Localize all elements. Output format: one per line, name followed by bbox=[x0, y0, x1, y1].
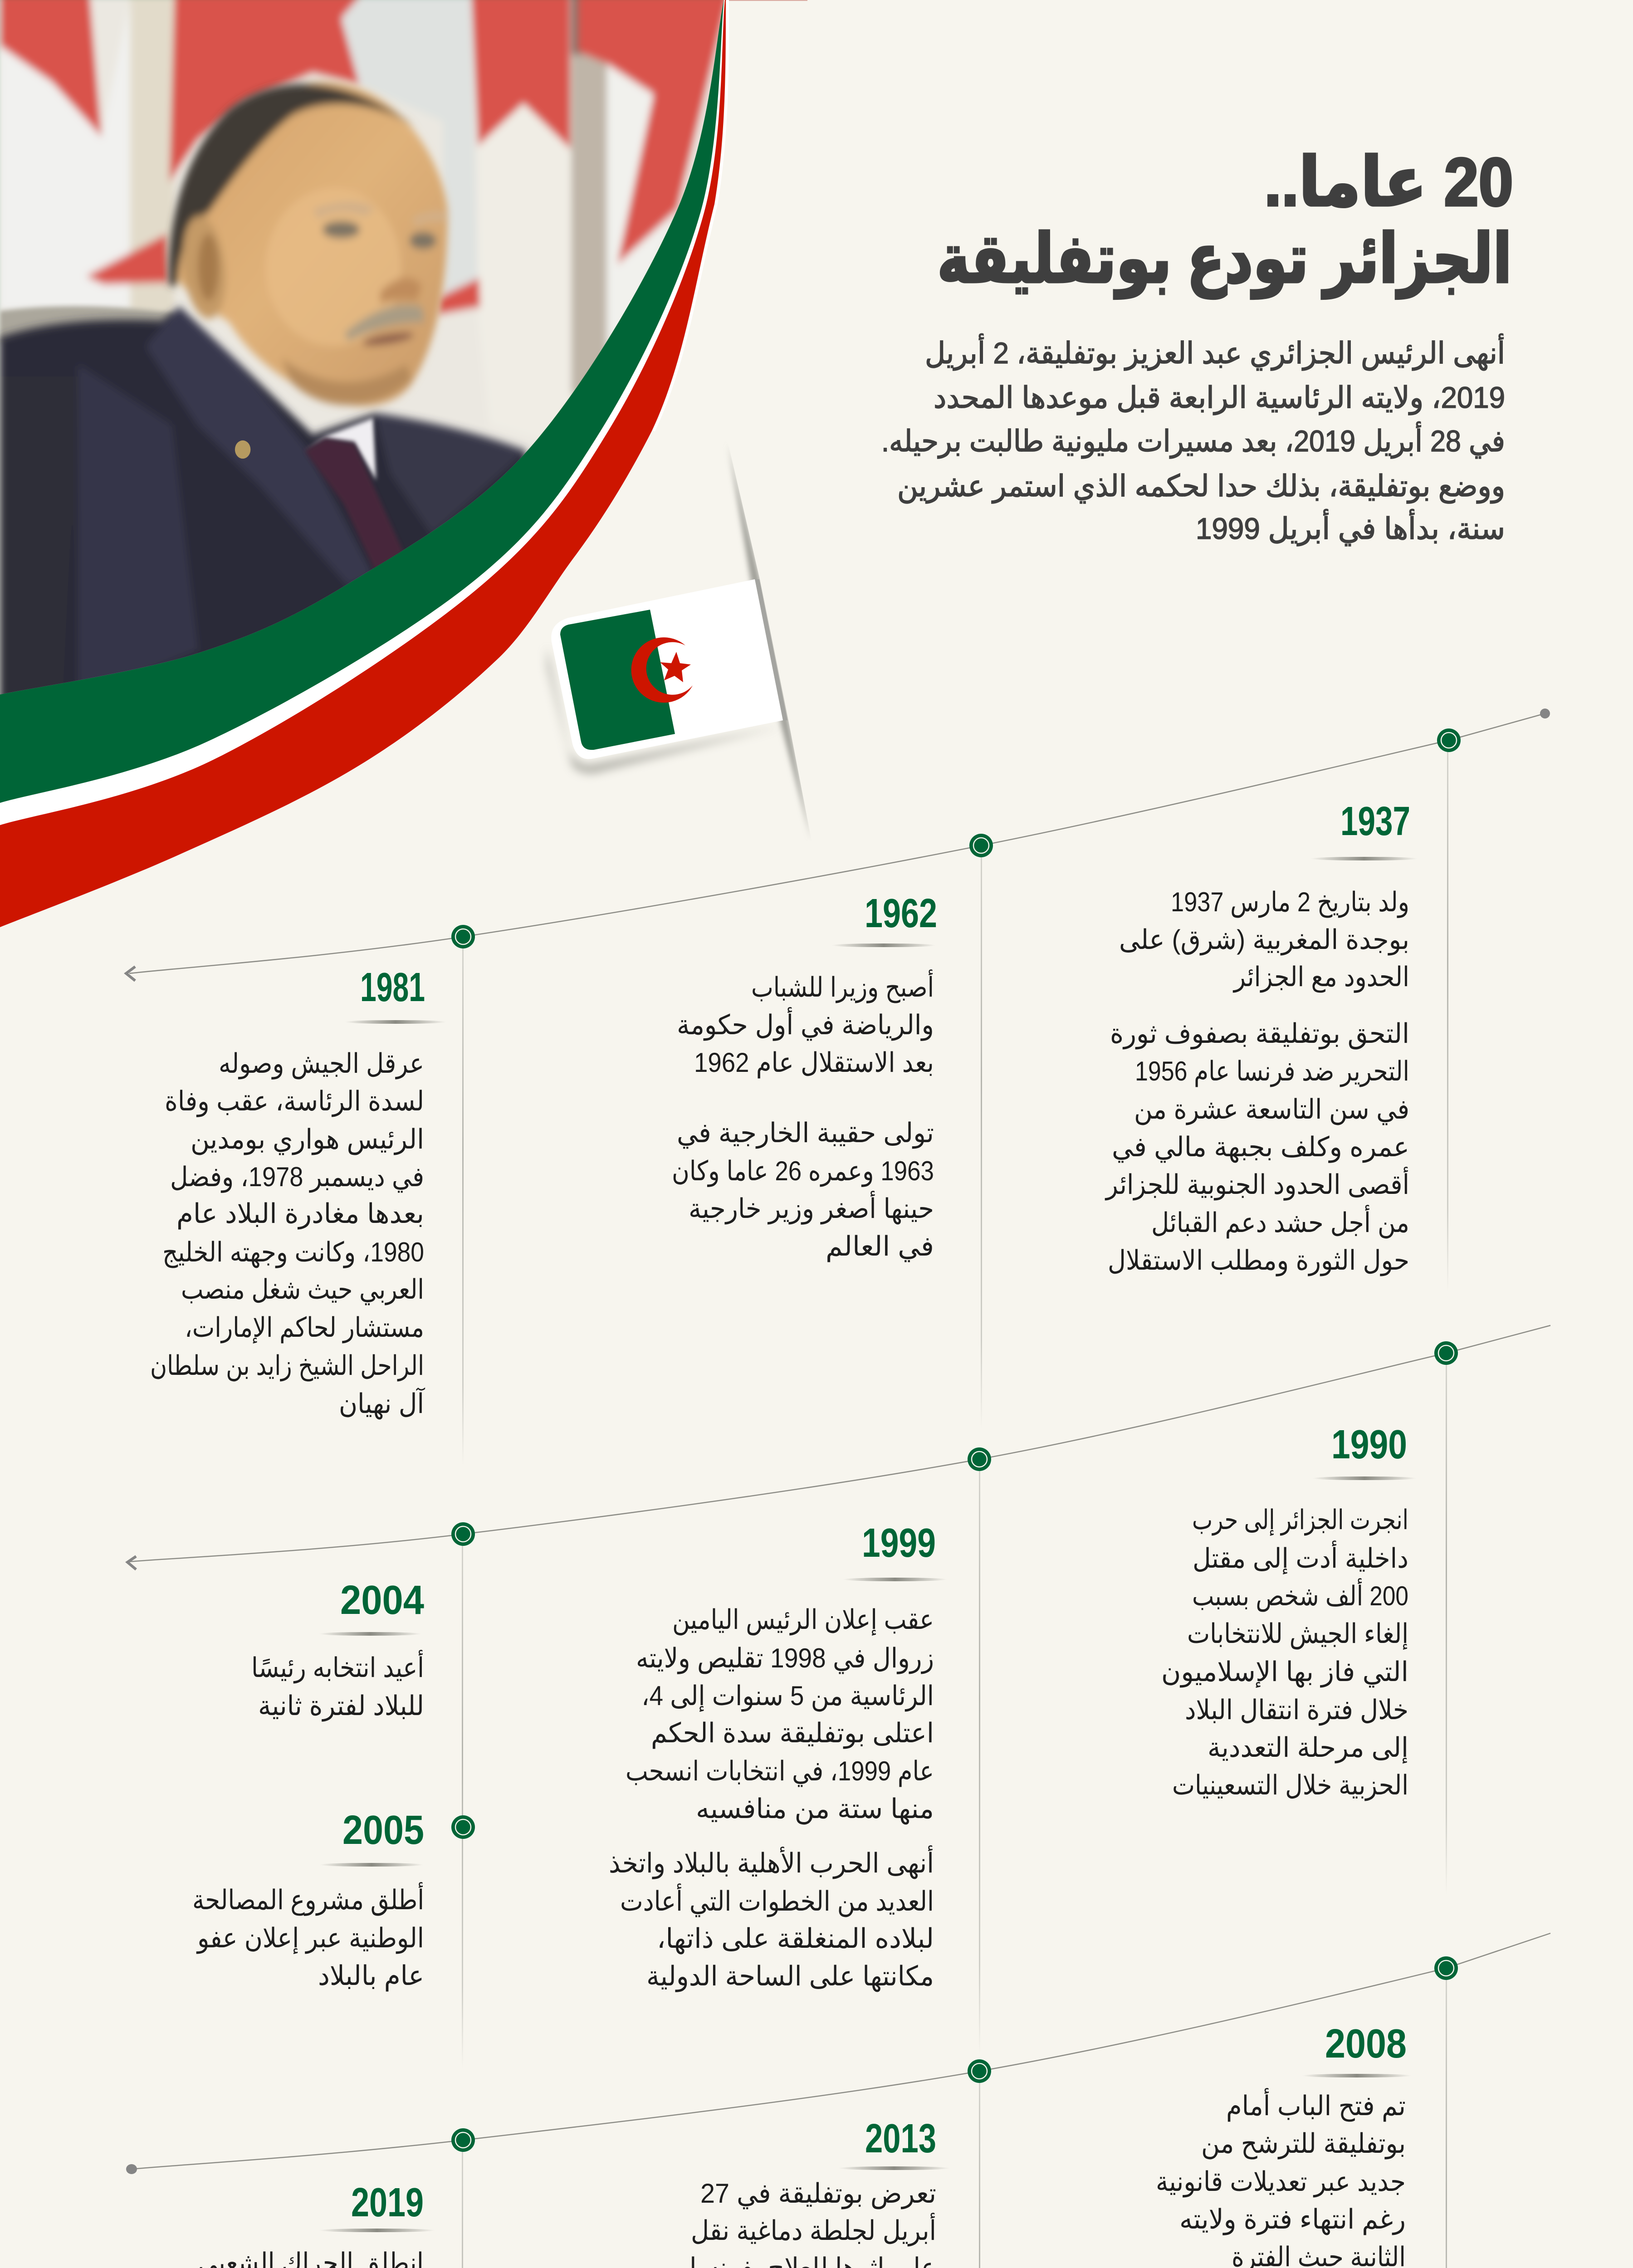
timeline curve 2 bbox=[128, 1325, 1550, 1562]
timeline row 3 bbox=[126, 1933, 1550, 2268]
year 1990: 1990 bbox=[1331, 1422, 1407, 1467]
marker 2008 bbox=[1434, 1956, 1458, 1980]
portrait photo illustration bbox=[0, 0, 734, 735]
body text: الحدود مع الجزائر bbox=[1232, 962, 1409, 993]
arrow head bbox=[126, 967, 135, 981]
body text: في العالم bbox=[826, 1231, 934, 1262]
body text: مستشار لحاكم الإمارات، bbox=[185, 1312, 424, 1344]
lapel pin bbox=[235, 440, 250, 459]
entry 2013 bbox=[689, 2116, 950, 2268]
chair bbox=[0, 306, 175, 343]
body text: تم فتح الباب أمام bbox=[1226, 2088, 1406, 2122]
body text: إلى مرحلة التعددية bbox=[1208, 1732, 1408, 1764]
body text: من أجل حشد دعم القبائل bbox=[1151, 1205, 1409, 1239]
body text: جديد عبر تعديلات قانونية bbox=[1156, 2166, 1406, 2198]
body text: آل نهيان bbox=[339, 1387, 425, 1420]
intro text block: 2019، ولايته الرئاسية الرابعة قبل موعدها المحدد bbox=[934, 381, 1505, 415]
body text: في ديسمبر 1978، وفضل bbox=[170, 1162, 424, 1193]
body text: حينها أصغر وزير خارجية bbox=[689, 1191, 934, 1225]
head bbox=[169, 82, 448, 406]
body text: لبلاده المنغلقة على ذاتها، bbox=[657, 1923, 934, 1955]
timeline curve 1 bbox=[129, 714, 1545, 973]
body text: اعتلى بوتفليقة سدة الحكم bbox=[651, 1718, 934, 1749]
body text: والرياضة في أول حكومة bbox=[677, 1007, 934, 1041]
body text: رغم انتهاء فترة ولايته bbox=[1179, 2204, 1406, 2235]
body text: أبريل لجلطة دماغية نقل bbox=[691, 2213, 936, 2247]
body text: العديد من الخطوات التي أعادت bbox=[620, 1883, 934, 1917]
intro text block: في 28 أبريل 2019، بعد مسيرات مليونية طالبت برحيله. bbox=[881, 421, 1505, 459]
underline bbox=[319, 1632, 421, 1636]
body text: منها ستة من منافسيه bbox=[696, 1794, 934, 1825]
marker 1999 bbox=[968, 1447, 991, 1471]
body text: بعدها مغادرة البلاد عام bbox=[176, 1198, 424, 1230]
body text: التحرير ضد فرنسا عام 1956 bbox=[1135, 1056, 1409, 1087]
body text bbox=[672, 969, 934, 1262]
body text: الرئاسية من 5 سنوات إلى 4، bbox=[641, 1681, 934, 1712]
marker 1962 bbox=[969, 834, 993, 857]
intro text block bbox=[881, 333, 1505, 546]
body text bbox=[1161, 1505, 1408, 1801]
banner: red, white and green ribbons with portrait bbox=[0, 0, 734, 927]
body text: تعرض بوتفليقة في 27 bbox=[700, 2178, 936, 2209]
body text bbox=[150, 1048, 425, 1420]
white edge on red ribbon bbox=[654, 0, 728, 431]
decorative thin strip at top bbox=[724, 0, 807, 1]
body text: داخلية أدت إلى مقتل bbox=[1193, 1540, 1408, 1574]
body text: زروال في 1998 تقليص ولايته bbox=[636, 1643, 934, 1674]
timeline curve 3 bbox=[132, 1933, 1550, 2169]
year 1981: 1981 bbox=[360, 965, 425, 1010]
underline bbox=[319, 2229, 435, 2232]
underline bbox=[1302, 2074, 1412, 2077]
body text: الوطنية عبر إعلان عفو bbox=[196, 1923, 424, 1954]
body text: 1963 وعمره 26 عاما وكان bbox=[672, 1156, 934, 1187]
body text: ولد بتاريخ 2 مارس 1937 bbox=[1171, 887, 1409, 918]
underline bbox=[1310, 857, 1418, 860]
entry 1937 bbox=[1105, 799, 1418, 1276]
entry 1999 bbox=[609, 1520, 947, 1992]
underline bbox=[1312, 1476, 1417, 1480]
body text: بوتفليقة للترشح من bbox=[1201, 2128, 1406, 2160]
entry 2005 bbox=[192, 1808, 424, 1991]
marker 2013 bbox=[968, 2059, 991, 2083]
year 1937: 1937 bbox=[1340, 799, 1410, 844]
intro text block: أنهى الرئيس الجزائري عبد العزيز بوتفليقة، 2 أبريل bbox=[925, 333, 1505, 371]
title bbox=[937, 144, 1513, 299]
body text: التي فاز بها الإسلاميون bbox=[1161, 1657, 1408, 1688]
body text: عام بالبلاد bbox=[318, 1960, 424, 1991]
start dot bbox=[1540, 709, 1550, 719]
title: 20 عاما.. bbox=[1264, 144, 1513, 220]
flag green field bbox=[560, 610, 675, 750]
flag pole shadow bbox=[728, 443, 812, 841]
underline bbox=[831, 943, 936, 947]
body text: لسدة الرئاسة، عقب وفاة bbox=[165, 1086, 424, 1117]
body text: مكانتها على الساحة الدولية bbox=[646, 1961, 934, 1992]
underline bbox=[345, 1020, 446, 1024]
icon: Algerian flag on pole bbox=[547, 443, 812, 841]
entry 1990 bbox=[1161, 1422, 1417, 1801]
end dot bbox=[126, 2164, 137, 2174]
suit bbox=[0, 307, 526, 735]
underline bbox=[838, 2166, 950, 2170]
entry 1981 bbox=[150, 965, 446, 1420]
entry 2008 bbox=[1156, 2021, 1412, 2268]
body text: بعد الاستقلال عام 1962 bbox=[694, 1047, 934, 1078]
title: الجزائر تودع بوتفليقة bbox=[937, 220, 1512, 299]
white ribbon bbox=[0, 0, 725, 825]
marker 1937 bbox=[1437, 728, 1461, 752]
body text: أطلق مشروع المصالحة bbox=[192, 1882, 424, 1916]
body text bbox=[689, 2178, 936, 2268]
body text bbox=[1156, 2088, 1406, 2268]
year 2005: 2005 bbox=[342, 1808, 424, 1853]
year 2013: 2013 bbox=[865, 2116, 936, 2161]
photo background: flags bbox=[0, 0, 734, 735]
body text bbox=[251, 1650, 424, 1722]
timeline row 1 bbox=[126, 709, 1550, 1465]
year 2008: 2008 bbox=[1325, 2021, 1407, 2067]
red ribbon bbox=[0, 0, 726, 927]
body text: الحزبية خلال التسعينيات bbox=[1172, 1770, 1408, 1801]
body text bbox=[192, 1882, 424, 1991]
body text: 1980، وكانت وجهته الخليج bbox=[162, 1237, 424, 1268]
year 2019: 2019 bbox=[351, 2180, 424, 2225]
marker 1981 bbox=[451, 925, 475, 948]
body text: عرقل الجيش وصوله bbox=[219, 1048, 424, 1080]
marker 2005 bbox=[451, 1815, 475, 1839]
body text: العربي حيث شغل منصب bbox=[181, 1274, 424, 1305]
timeline row 2 bbox=[127, 1325, 1550, 2068]
body text: أعيد انتخابه رئيسًا bbox=[251, 1650, 424, 1684]
body text: عام 1999، في انتخابات انسحب bbox=[626, 1756, 934, 1787]
marker 2004 bbox=[451, 1522, 475, 1546]
body text: إلغاء الجيش للانتخابات bbox=[1187, 1618, 1408, 1650]
body text: أصبح وزيرا للشباب bbox=[751, 969, 934, 1003]
body text: بوجدة المغربية (شرق) على bbox=[1119, 924, 1409, 956]
flag crescent bbox=[631, 637, 693, 703]
body text: في سن التاسعة عشرة من bbox=[1134, 1094, 1409, 1125]
intro text block: سنة، بدأها في أبريل 1999 bbox=[1196, 509, 1505, 546]
flag drop shadow bbox=[547, 646, 783, 774]
flag star bbox=[660, 652, 691, 682]
body text: تولى حقيبة الخارجية في bbox=[677, 1118, 934, 1149]
body text: خلال فترة انتقال البلاد bbox=[1185, 1695, 1408, 1726]
body text: انجرت الجزائر إلى حرب bbox=[1192, 1505, 1408, 1536]
marker 2019 bbox=[451, 2128, 475, 2152]
body text: التحق بوتفليقة بصفوف ثورة bbox=[1110, 1018, 1409, 1050]
body text: أقصى الحدود الجنوبية للجزائر bbox=[1105, 1167, 1409, 1201]
underline bbox=[319, 1863, 424, 1867]
body text bbox=[609, 1604, 934, 1992]
entry 2004 bbox=[251, 1578, 424, 1722]
intro text block: ووضع بوتفليقة، بذلك حدا لحكمه الذي استمر عشرين bbox=[897, 469, 1505, 503]
shirt collar bbox=[235, 358, 376, 480]
flag white field bbox=[551, 579, 783, 759]
body text: للبلاد لفترة ثانية bbox=[258, 1691, 424, 1722]
year 1999: 1999 bbox=[862, 1520, 936, 1566]
body text: أنهى الحرب الأهلية بالبلاد واتخذ bbox=[609, 1845, 934, 1879]
year 1962: 1962 bbox=[865, 891, 937, 936]
arrow head bbox=[127, 1556, 136, 1569]
body text: 200 ألف شخص بسبب bbox=[1192, 1578, 1408, 1612]
body text: عقب إعلان الرئيس اليامين bbox=[672, 1604, 934, 1636]
body text: الراحل الشيخ زايد بن سلطان bbox=[150, 1350, 424, 1382]
underline bbox=[843, 1578, 947, 1581]
tie bbox=[305, 439, 404, 571]
body text: حول الثورة ومطلب الاستقلال bbox=[1108, 1245, 1409, 1276]
body text bbox=[1105, 887, 1409, 1276]
entry 1962 bbox=[672, 891, 937, 1262]
year 2004: 2004 bbox=[340, 1578, 424, 1623]
entry 2019 bbox=[132, 2180, 435, 2268]
marker 1990 bbox=[1434, 1341, 1458, 1365]
body text: الرئيس هواري بومدين bbox=[191, 1124, 424, 1155]
body text: عمره وكلف بجبهة مالي في bbox=[1112, 1132, 1409, 1163]
green ribbon bbox=[0, 0, 724, 803]
